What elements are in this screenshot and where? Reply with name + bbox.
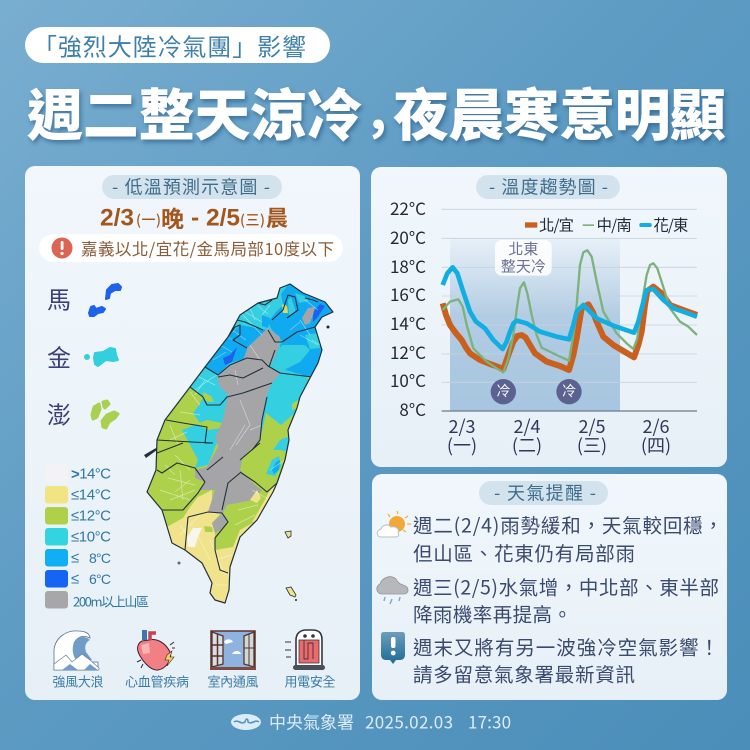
text: weekend note <box>413 632 719 688</box>
icon: rain cloud <box>377 577 408 604</box>
marker: cold <box>556 379 582 404</box>
island: Matsu <box>89 284 121 316</box>
x axis labels: 2/5 <box>578 413 606 439</box>
panel: weather reminders <box>372 474 727 700</box>
date range: (三) <box>240 210 265 230</box>
date range: 晨 <box>266 201 288 233</box>
legend: ≤10°C <box>71 528 111 546</box>
text: Tuesday note: 但山區、花東仍有局部雨 <box>413 538 635 566</box>
x axis labels: (三) <box>577 432 607 458</box>
x axis labels <box>447 413 671 458</box>
title: 週二整天涼冷 <box>27 72 362 152</box>
y axis labels: 10°C <box>390 367 426 392</box>
y axis labels: 20°C <box>390 224 426 249</box>
panel: temperature trend <box>371 167 727 467</box>
y axis labels: 8°C <box>399 396 426 421</box>
series: central south <box>443 250 697 372</box>
x axis labels: (一) <box>447 432 477 458</box>
x axis labels: 2/3 <box>448 413 476 439</box>
township lines <box>160 300 320 585</box>
title <box>27 72 726 152</box>
callout: northeast all-day cold: 整天冷 <box>501 255 546 276</box>
label: Kinmen: 金 <box>47 338 71 374</box>
y axis labels: 22°C <box>390 195 426 220</box>
gray mountains <box>195 328 280 533</box>
date range: 晚 <box>161 200 184 234</box>
yellow south <box>168 490 270 602</box>
map of Taiwan <box>144 283 334 604</box>
icon: exclamation tag <box>381 632 405 664</box>
x axis labels: (四) <box>641 432 671 458</box>
date range: (一) <box>136 210 161 230</box>
panel: low temperature map <box>25 166 360 700</box>
icon: heart <box>137 630 175 670</box>
text: Tuesday note <box>413 510 723 566</box>
legend: ≤12°C <box>71 508 111 524</box>
subtitle pill: 「強烈大陸冷氣團」影響 <box>33 28 306 62</box>
marker: cold: 冷 <box>562 381 576 401</box>
series: east <box>443 267 697 349</box>
minor islands <box>285 531 291 538</box>
label: Penghu: 澎 <box>47 396 71 430</box>
legend: >14°C <box>71 466 111 482</box>
chart legend: 中/南 <box>597 213 632 235</box>
icon: window <box>210 631 256 670</box>
blue north <box>269 284 332 342</box>
icon: warning <box>52 238 72 258</box>
callout: northeast all-day cold <box>495 238 552 276</box>
text: Wednesday note <box>413 572 719 628</box>
footer <box>231 708 511 734</box>
marker: cold: 冷 <box>496 381 510 401</box>
text: weekend note: 請多留意氣象署最新資訊 <box>413 658 635 688</box>
date range: - 2/5 <box>191 204 240 232</box>
callout: northeast all-day cold: 北東 <box>508 238 538 259</box>
text: weekend note: 週末又將有另一波強冷空氣影響！ <box>413 632 719 660</box>
chart legend: 北/宜 <box>539 213 574 235</box>
marker: cold <box>491 379 516 404</box>
chart legend: 花/東 <box>653 213 688 235</box>
county borders <box>157 295 318 573</box>
text: Wednesday note: 週三(2/5)水氣增，中北部、東半部 <box>413 572 719 600</box>
y axis labels: 18°C <box>390 253 426 278</box>
cyan north <box>182 286 308 468</box>
legend: ≤14°C <box>71 486 111 504</box>
footer: 中央氣象署 <box>269 708 354 734</box>
label: Matsu: 馬 <box>47 280 71 316</box>
text: Tuesday note: 週二(2/4)雨勢緩和，天氣較回穩， <box>413 510 723 538</box>
line chart <box>390 195 697 458</box>
heading: weather reminders: - 天氣提醒 - <box>494 480 596 506</box>
island: Penghu <box>92 401 118 428</box>
date range <box>100 200 288 234</box>
icon: sun and cloud <box>377 511 411 537</box>
y axis labels: 12°C <box>390 339 426 364</box>
y axis labels <box>390 195 426 421</box>
y axis labels: 16°C <box>390 281 426 306</box>
y axis labels: 14°C <box>390 310 426 335</box>
text: Wednesday note: 降雨機率再提高。 <box>413 598 572 628</box>
icon: heater <box>285 630 325 670</box>
series: north <box>443 287 697 370</box>
heading: temperature trend: - 溫度趨勢圖 - <box>489 174 608 200</box>
legend: 8°C <box>89 550 111 566</box>
date range: 2/3 <box>100 204 134 232</box>
title: , <box>370 77 386 143</box>
label: cardiovascular disease: 心血管疾病 <box>125 672 189 690</box>
chart legend <box>525 213 688 235</box>
island outline <box>147 284 333 603</box>
icon: CWA logo <box>231 714 261 730</box>
title: 夜晨寒意明顯 <box>393 72 726 152</box>
legend: ≤ <box>71 550 79 566</box>
x axis labels: 2/6 <box>642 413 670 439</box>
legend <box>45 465 149 610</box>
alert pill: 嘉義以北/宜花/金馬局部10度以下 <box>81 236 334 260</box>
legend: 200m以上山區 <box>73 592 149 610</box>
legend: 6°C <box>89 571 111 587</box>
x axis labels: (二) <box>512 432 542 458</box>
heading: low temperature map: - 低溫預測示意圖 - <box>112 174 270 200</box>
label: electrical safety: 用電安全 <box>284 672 336 690</box>
legend: ≤ <box>71 570 79 588</box>
x axis labels: 2/4 <box>513 413 541 439</box>
icon: big waves <box>54 631 99 670</box>
footer: 2025.02.03 <box>365 708 453 734</box>
label: indoor ventilation: 室內通風 <box>208 672 258 690</box>
footer: 17:30 <box>468 708 511 734</box>
label: big waves: 強風大浪 <box>52 672 104 690</box>
island: Kinmen <box>85 348 118 366</box>
